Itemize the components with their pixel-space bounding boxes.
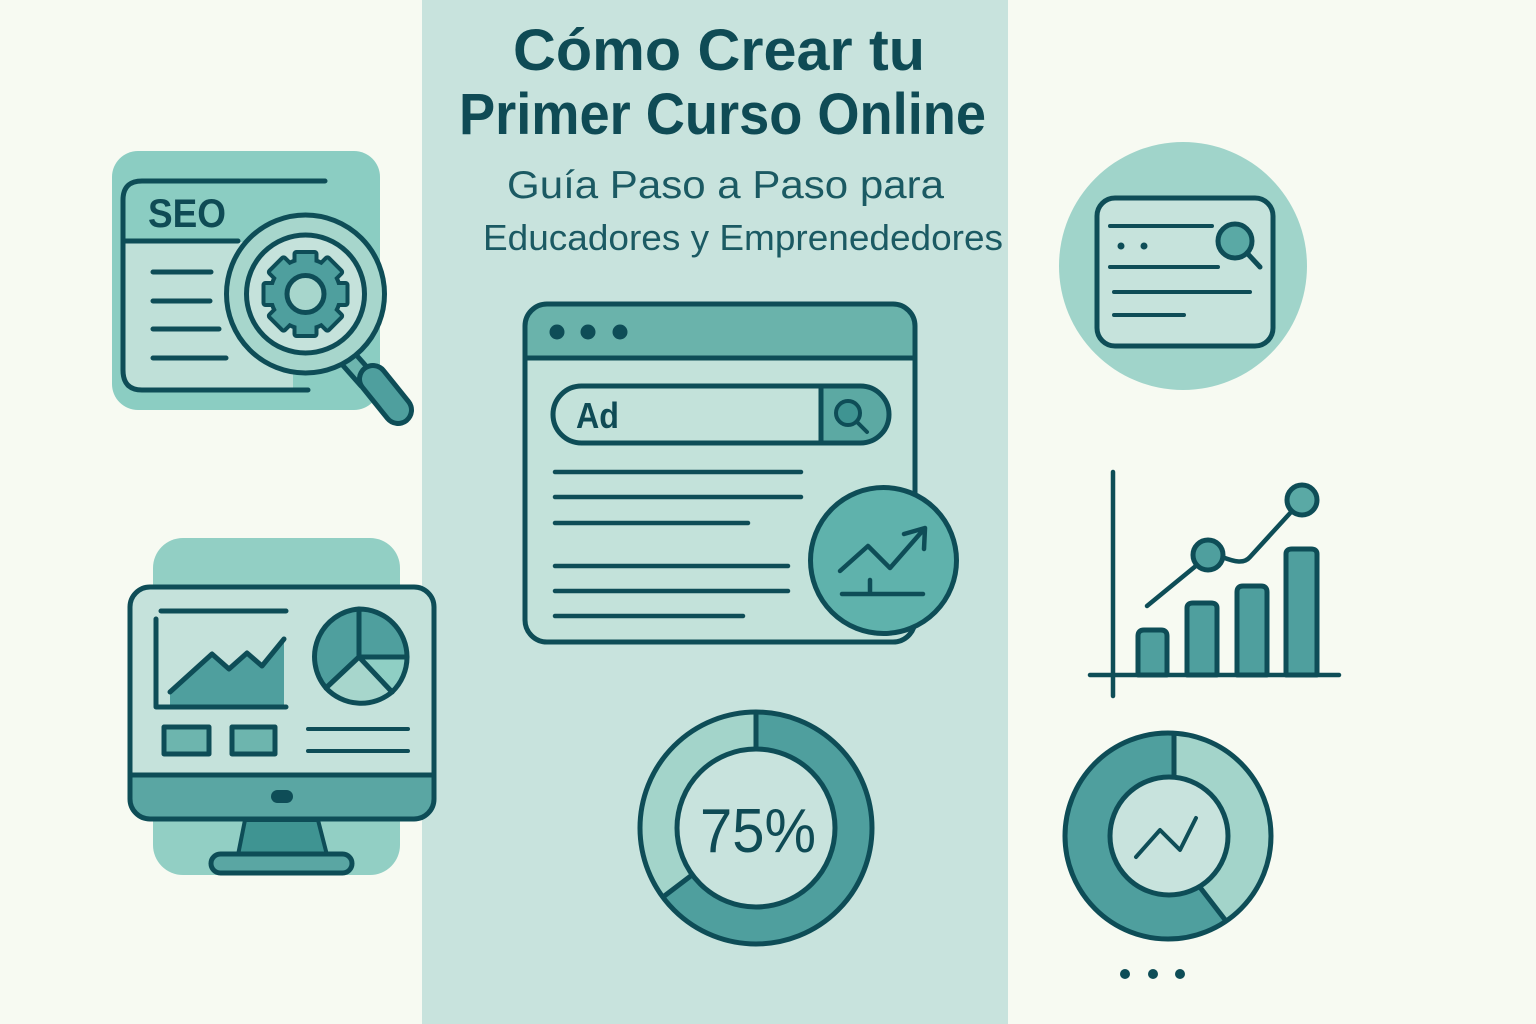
central column panel	[422, 0, 1008, 1024]
SEO label: SEO	[148, 192, 226, 236]
title: Cómo Crear tu	[513, 18, 925, 83]
magnifier lens	[226, 215, 384, 373]
trend line	[1147, 511, 1292, 606]
value label: 75%	[700, 797, 816, 866]
dashboard text lines	[308, 729, 408, 751]
icon: browser window with ad search	[525, 304, 956, 642]
icon: SEO page with magnifier	[112, 151, 398, 410]
search bar: Ad	[576, 395, 619, 436]
title: Primer Curso Online	[459, 82, 986, 147]
axes	[1090, 472, 1339, 696]
text lines	[555, 472, 801, 616]
subtitle: Guía Paso a Paso para	[507, 164, 944, 207]
monitor screen	[130, 587, 434, 775]
pagination dots	[1120, 969, 1185, 979]
area chart	[156, 611, 286, 707]
growth badge	[810, 488, 956, 634]
subtitle: Educadores y Emprenededores	[483, 217, 1003, 258]
subtitle	[483, 164, 1003, 258]
icon: browser card in circle	[1059, 142, 1307, 390]
magnifier handle	[345, 355, 398, 410]
gear	[266, 254, 346, 334]
bar and line chart	[1090, 472, 1339, 696]
window dots	[550, 324, 628, 340]
pie chart	[315, 609, 407, 703]
donut chart with trend icon	[1065, 733, 1271, 939]
icon: desktop monitor dashboard	[130, 538, 434, 875]
donut chart: 75%	[640, 712, 872, 944]
monitor bezel	[130, 775, 434, 819]
small magnifier	[1218, 224, 1252, 258]
title	[459, 18, 986, 147]
bars	[1138, 549, 1317, 675]
dashboard boxes	[164, 727, 275, 754]
monitor stand	[238, 820, 327, 855]
search bar	[553, 386, 889, 443]
